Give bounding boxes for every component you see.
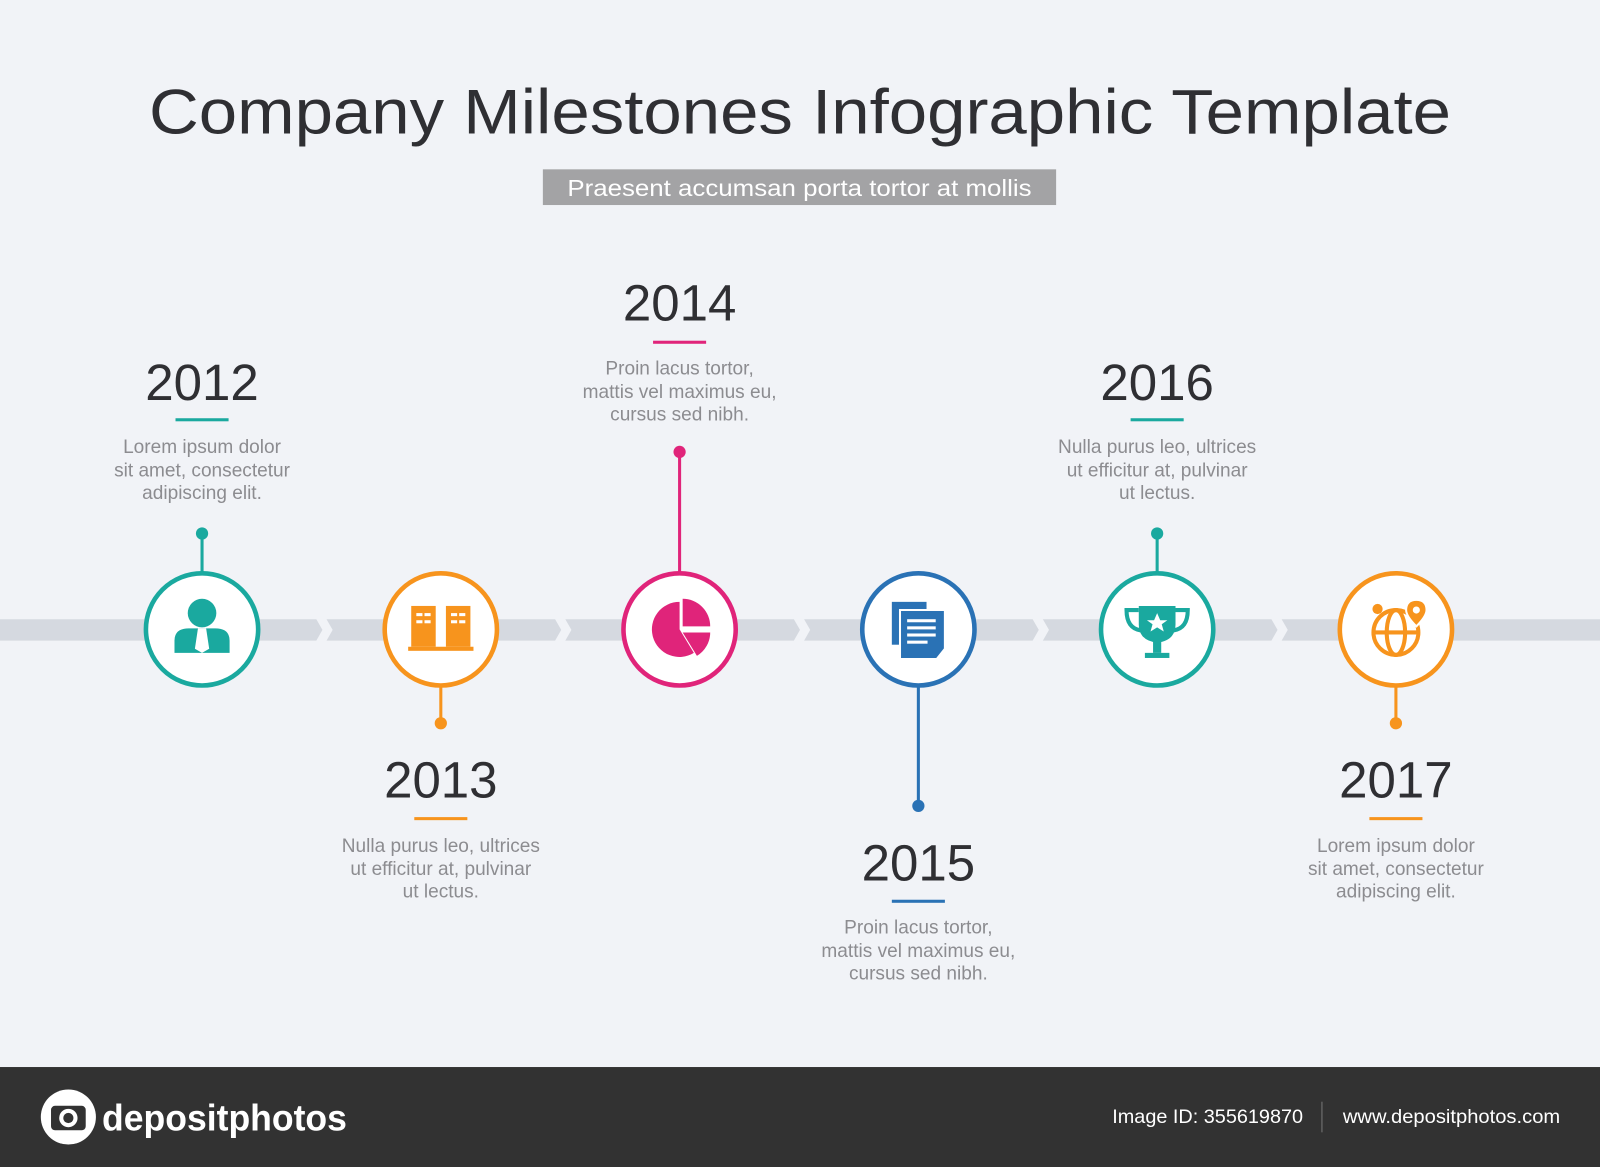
footer bar: www.depositphotos.com	[1342, 1106, 1560, 1128]
milestone 2015: mattis vel maximus eu,	[821, 941, 1015, 962]
milestone 2014: mattis vel maximus eu,	[583, 382, 777, 403]
subtitle bar: Praesent accumsan porta tortor at mollis	[567, 175, 1032, 201]
milestone 2016	[1058, 354, 1256, 686]
milestone 2013	[342, 573, 540, 903]
footer bar	[0, 1067, 1600, 1167]
milestone 2016: 2016	[1100, 354, 1214, 411]
milestone 2012: sit amet, consectetur	[114, 460, 291, 481]
milestone 2016: ut lectus.	[1119, 483, 1195, 504]
milestone 2013: ut efficitur at, pulvinar	[350, 859, 532, 880]
milestone 2012: adipiscing elit.	[142, 483, 262, 504]
milestone 2016: Nulla purus leo, ultrices	[1058, 437, 1256, 458]
milestone 2014: cursus sed nibh.	[610, 404, 749, 425]
icon: book	[408, 606, 473, 651]
milestone 2017: sit amet, consectetur	[1308, 859, 1485, 880]
milestone 2013: Nulla purus leo, ultrices	[342, 836, 540, 857]
title: Company Milestones Infographic Template	[149, 78, 1451, 148]
milestone 2015	[821, 573, 1015, 984]
footer bar: Image ID: 355619870	[1112, 1106, 1303, 1128]
icon: globe with pin	[1373, 610, 1418, 655]
milestone 2013: ut lectus.	[403, 882, 479, 903]
milestone 2013: 2013	[384, 752, 498, 809]
milestone 2017: Lorem ipsum dolor	[1317, 836, 1476, 857]
milestone 2012: 2012	[145, 354, 259, 411]
subtitle bar	[543, 169, 1056, 205]
milestone 2015: 2015	[862, 834, 975, 891]
milestone 2017	[1308, 573, 1485, 903]
milestone 2014: 2014	[623, 274, 736, 331]
icon: camera logo	[41, 1089, 96, 1145]
milestone 2012	[114, 354, 291, 686]
milestone 2017: adipiscing elit.	[1336, 882, 1456, 903]
milestone 2015: Proin lacus tortor,	[844, 917, 993, 938]
milestone 2014: Proin lacus tortor,	[605, 358, 754, 379]
icon: trophy	[1127, 606, 1188, 658]
milestone 2012: Lorem ipsum dolor	[123, 437, 282, 458]
milestone 2015: cursus sed nibh.	[849, 963, 988, 984]
milestone 2017: 2017	[1339, 752, 1453, 809]
footer bar: depositphotos	[102, 1097, 347, 1138]
icon: pie chart	[652, 599, 710, 657]
timeline band	[0, 619, 1600, 641]
milestone 2014	[583, 274, 777, 686]
icon: person	[174, 599, 230, 653]
milestone 2016: ut efficitur at, pulvinar	[1067, 460, 1248, 481]
icon: documents	[892, 602, 945, 659]
